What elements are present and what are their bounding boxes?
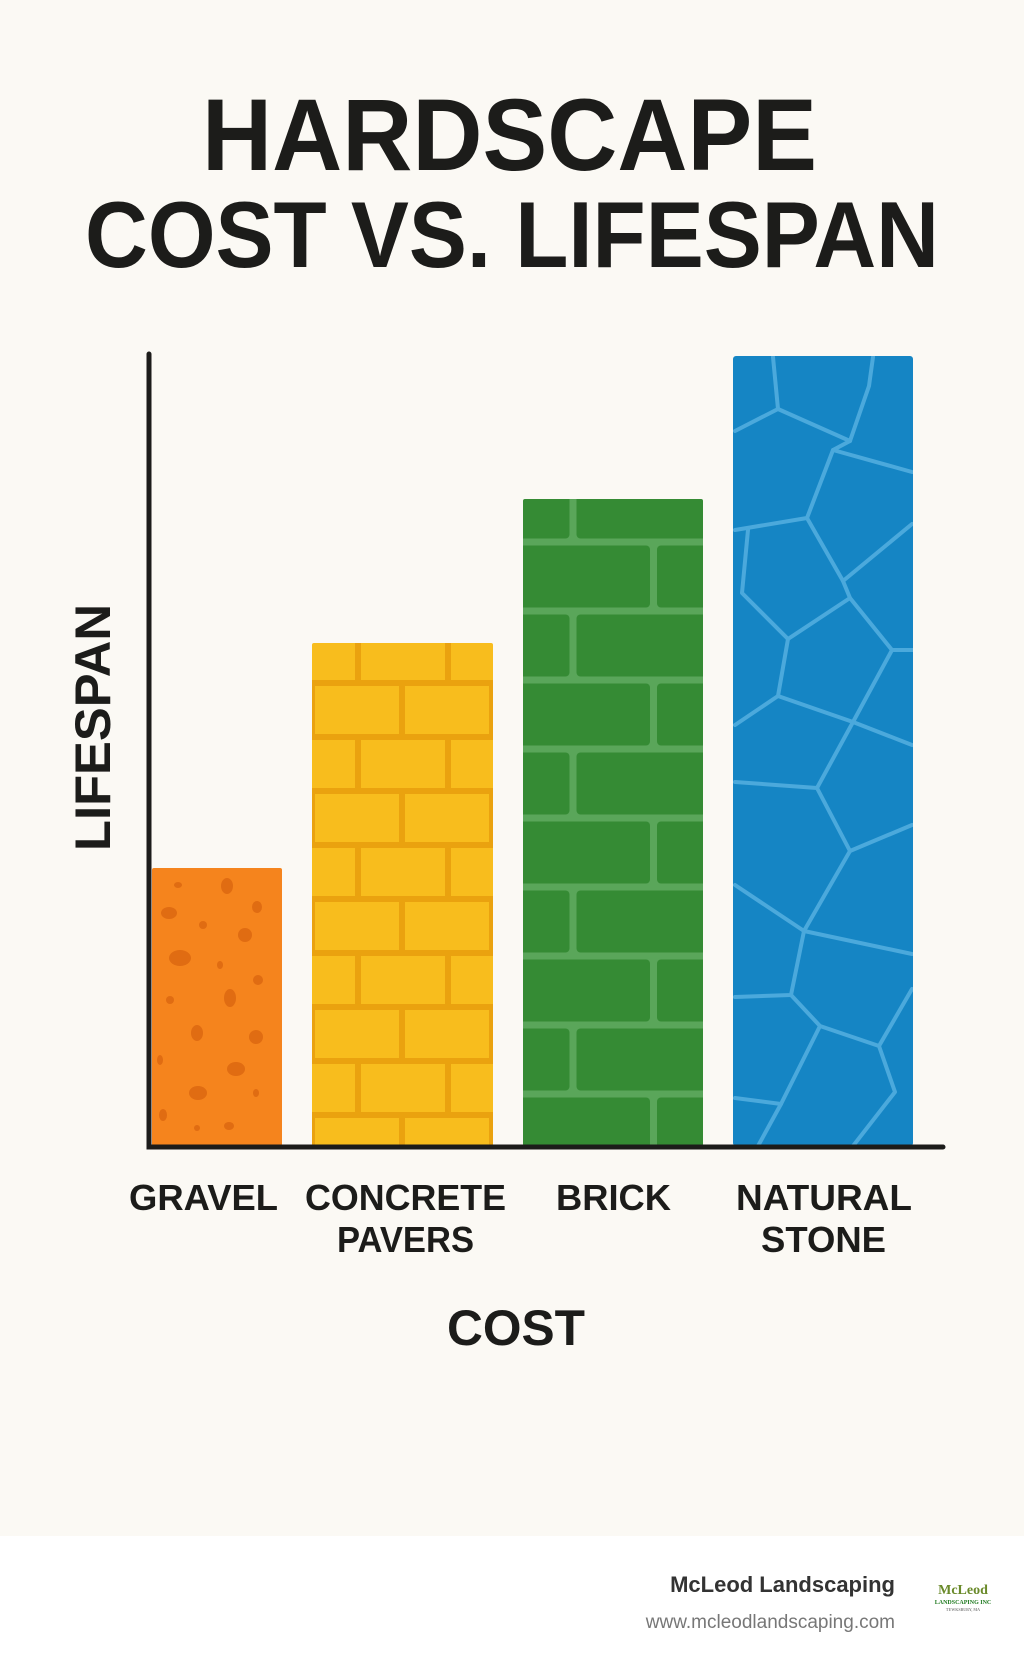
logo xyxy=(935,1583,991,1612)
category labels: GRAVEL xyxy=(129,1177,278,1218)
footer: www.mcleodlandscaping.com xyxy=(645,1612,895,1633)
bar: brick xyxy=(523,499,703,1146)
axes xyxy=(149,354,943,1147)
category labels: PAVERS xyxy=(337,1219,474,1260)
y-axis label: LIFESPAN: LIFESPAN xyxy=(65,604,121,851)
x-axis label: COST: COST xyxy=(447,1300,585,1356)
title xyxy=(85,78,939,287)
category labels: NATURAL xyxy=(736,1177,912,1218)
logo: McLeod xyxy=(938,1583,988,1598)
title: HARDSCAPE xyxy=(202,78,817,192)
category labels xyxy=(129,1177,912,1260)
logo: TEWKSBURY, MA xyxy=(946,1607,980,1612)
bar: concrete pavers xyxy=(312,643,493,1146)
footer xyxy=(645,1572,895,1633)
category labels: STONE xyxy=(761,1219,886,1260)
category labels: CONCRETE xyxy=(305,1177,506,1218)
bar: gravel xyxy=(152,868,282,1146)
footer: McLeod Landscaping xyxy=(670,1572,895,1597)
category labels: BRICK xyxy=(556,1177,671,1218)
logo: LANDSCAPING INC xyxy=(935,1600,991,1606)
title: COST VS. LIFESPAN xyxy=(85,182,939,287)
bar: natural stone xyxy=(733,356,913,1146)
